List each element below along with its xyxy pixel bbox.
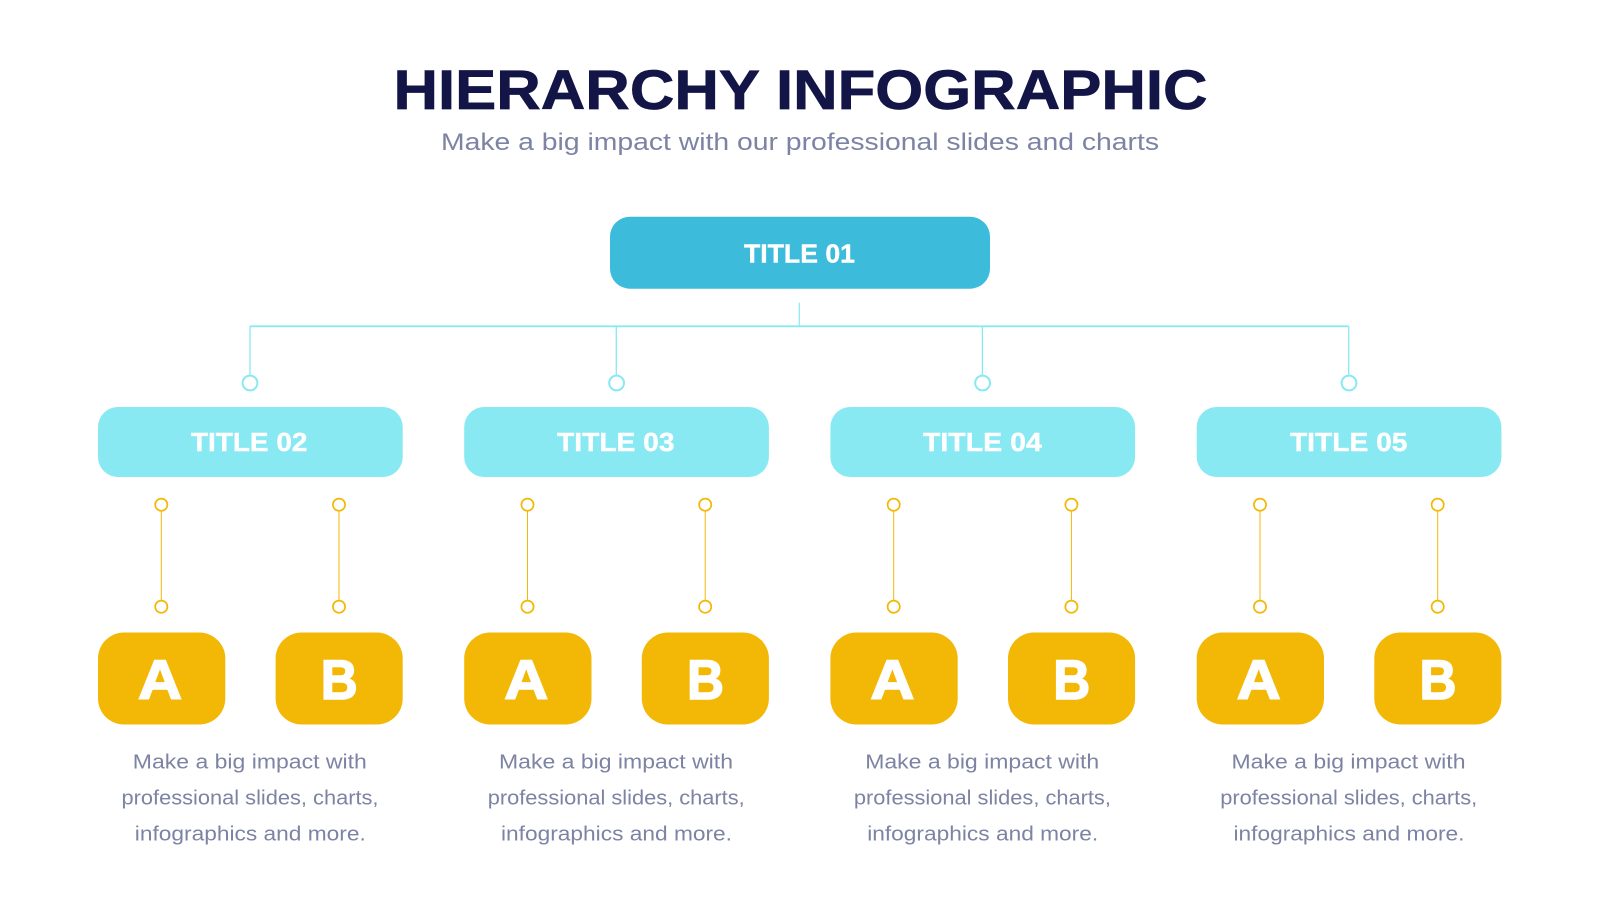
description: infographics and more. [1233, 822, 1464, 845]
box: title 03 [464, 407, 769, 477]
connector B [699, 499, 711, 613]
panel: column title 02 [98, 407, 403, 845]
box A: A [504, 648, 548, 711]
description [122, 750, 378, 845]
connector A [1254, 499, 1266, 613]
description [488, 750, 745, 845]
connector B [333, 499, 345, 613]
box: title 04: TITLE 04 [923, 427, 1042, 457]
description: professional slides, charts, [854, 786, 1111, 809]
description: Make a big impact with [499, 750, 733, 773]
box A: A [1237, 648, 1281, 711]
box B: B [1053, 648, 1090, 711]
title: HIERARCHY INFOGRAPHIC [394, 58, 1208, 121]
description [1220, 750, 1477, 845]
description: professional slides, charts, [1220, 786, 1477, 809]
description: infographics and more. [135, 822, 366, 845]
description: infographics and more. [867, 822, 1098, 845]
connector B [1065, 499, 1078, 613]
box B [1374, 632, 1501, 724]
description [854, 750, 1111, 845]
description: Make a big impact with [865, 750, 1099, 773]
connector A [888, 499, 900, 613]
box B: B [687, 648, 724, 711]
box: title 02: TITLE 02 [191, 427, 307, 457]
panel: column title 03 [464, 407, 769, 845]
box A: A [870, 648, 914, 711]
box A [830, 632, 958, 724]
connector B [1432, 499, 1444, 613]
box B: B [1419, 648, 1456, 711]
description: professional slides, charts, [488, 786, 745, 809]
description: professional slides, charts, [122, 786, 378, 809]
box B: B [321, 648, 358, 711]
box A [1197, 632, 1324, 724]
description: Make a big impact with [1231, 750, 1465, 773]
connector A [521, 499, 534, 613]
description: Make a big impact with [133, 750, 367, 773]
connector A [155, 499, 167, 613]
connector tree [243, 303, 1356, 390]
panel: column title 05 [1197, 407, 1501, 845]
top box: title 01 [610, 217, 990, 289]
box: title 05 [1197, 407, 1501, 477]
box: title 04 [830, 407, 1135, 477]
description: infographics and more. [501, 822, 732, 845]
top box: title 01: TITLE 01 [744, 241, 855, 269]
box A [98, 632, 225, 724]
box B [1008, 632, 1135, 724]
box B [642, 632, 769, 724]
box A: A [138, 648, 182, 711]
box: title 03: TITLE 03 [557, 427, 675, 457]
panel: column title 04 [830, 407, 1135, 845]
subtitle: Make a big impact with our professional slides and charts [441, 129, 1159, 156]
box A [464, 632, 592, 724]
box: title 05: TITLE 05 [1290, 427, 1407, 457]
box B [276, 632, 403, 724]
box: title 02 [98, 407, 403, 477]
